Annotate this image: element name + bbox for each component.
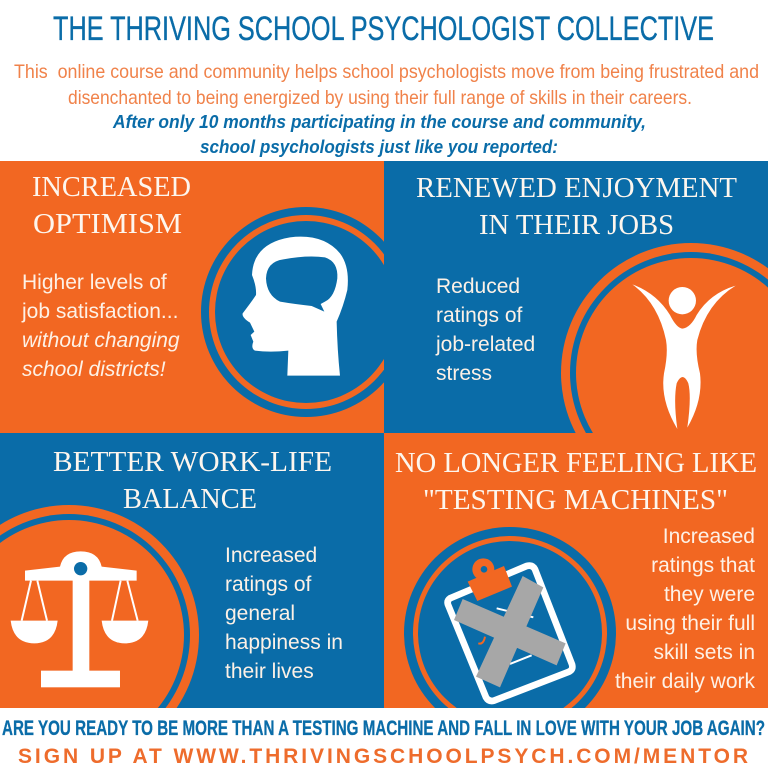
icon: balance scale [0, 505, 199, 708]
panel: no longer testing machines [384, 433, 768, 708]
heading: NO LONGER FEELING LIKE [395, 447, 757, 479]
intro text: disenchanted to being energized by using their full range of skills in their careers. [68, 87, 692, 109]
body text: Higher levels of [22, 271, 167, 294]
body text [21, 271, 180, 381]
body text [615, 525, 755, 693]
body text: happiness in [225, 631, 343, 654]
icon: crossed-out clipboard [404, 527, 616, 708]
heading: BALANCE [123, 483, 257, 515]
body text [225, 544, 343, 683]
body text: Increased [225, 544, 317, 567]
body text [435, 275, 535, 385]
header [14, 10, 759, 157]
results lead-in: school psychologists just like you reported: [200, 136, 558, 157]
heading [416, 172, 737, 241]
body text: general [225, 602, 295, 625]
body text: Reduced [436, 275, 520, 298]
icon: head with speech bubble [201, 207, 384, 417]
body text: job-related [435, 333, 535, 356]
intro text [14, 61, 759, 109]
body text: ratings of [225, 573, 312, 596]
body text: ratings of [436, 304, 523, 327]
heading: RENEWED ENJOYMENT [416, 172, 737, 204]
heading [53, 446, 332, 515]
panel: renewed enjoyment [384, 161, 768, 433]
results lead-in: After only 10 months participating in the course and community, [112, 111, 646, 132]
sign-up link: SIGN UP AT WWW.THRIVINGSCHOOLPSYCH.COM/MENTOR [18, 745, 748, 768]
body text: using their full [625, 612, 755, 635]
body text: stress [436, 362, 492, 385]
heading: INCREASED [32, 171, 191, 203]
body text: their lives [225, 660, 314, 683]
heading: IN THEIR JOBS [479, 209, 674, 241]
panel: better work-life balance [0, 433, 384, 708]
heading [395, 447, 757, 516]
body text: school districts! [22, 358, 166, 381]
body text: without changing [22, 329, 180, 352]
body text: Increased [663, 525, 755, 548]
footer call to action [2, 717, 765, 768]
body text: job satisfaction... [21, 300, 178, 323]
heading: BETTER WORK-LIFE [53, 446, 332, 478]
icon: person with raised arms [561, 243, 768, 433]
heading [32, 171, 191, 240]
heading: "TESTING MACHINES" [423, 484, 728, 516]
body text: their daily work [615, 670, 755, 693]
results lead-in [112, 111, 646, 157]
heading: OPTIMISM [33, 208, 182, 240]
panel: increased optimism [0, 161, 411, 433]
body text: skill sets in [653, 641, 755, 664]
body text: ratings that [651, 554, 755, 577]
body text: they were [664, 583, 755, 606]
